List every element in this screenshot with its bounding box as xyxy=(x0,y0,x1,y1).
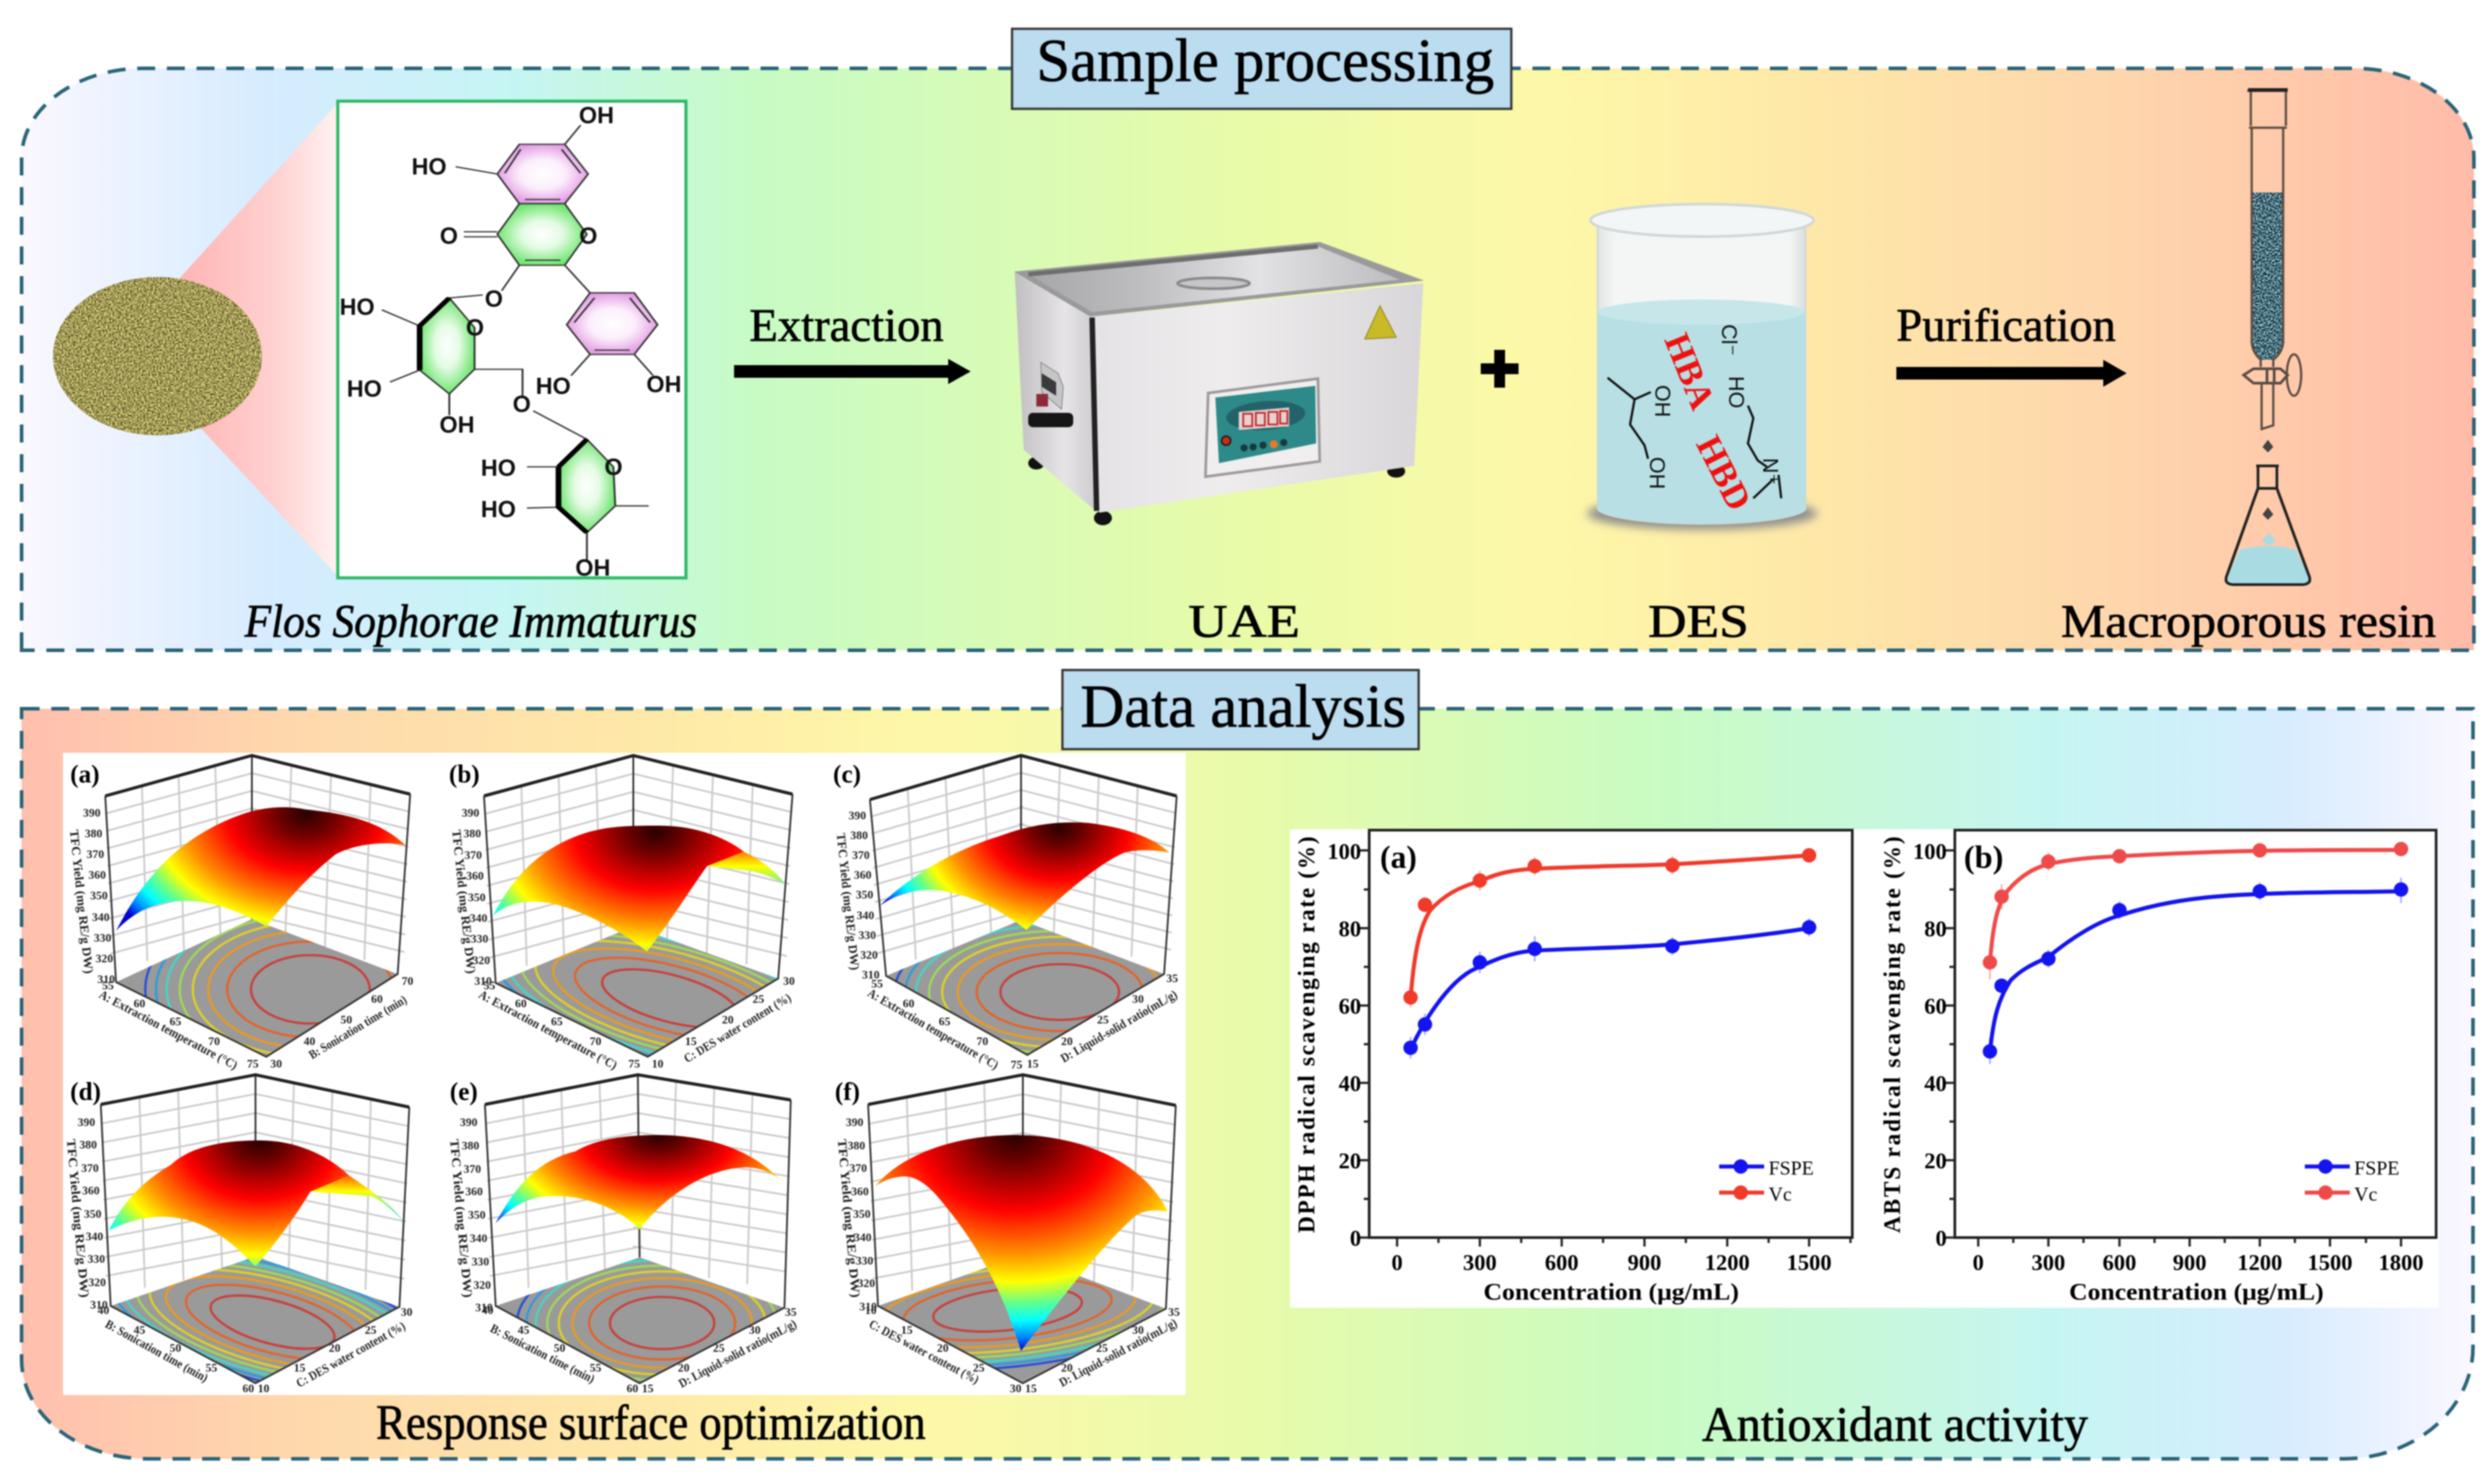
chart: surface plot a: 75 xyxy=(246,1057,259,1070)
chart: surface plot b: TFC Yield (mg RE/g DW) xyxy=(449,829,477,975)
chart: DPPH radical scavenging rate: 300 xyxy=(1463,1251,1497,1275)
chart: surface plot e: 380 xyxy=(461,1139,479,1152)
chart: surface plot e: 310 xyxy=(475,1301,493,1314)
chart: surface plot e: 25 xyxy=(712,1341,725,1354)
chart: surface plot a: 65 xyxy=(169,1015,182,1028)
chart: surface plot e: D: Liquid-solid ratio(mL/g) xyxy=(677,1318,800,1391)
chart: surface plot d xyxy=(67,1072,413,1393)
chart: DPPH radical scavenging rate: 0 xyxy=(1349,1227,1361,1251)
chart: surface plot b: 390 xyxy=(461,806,479,819)
chart: surface plot b: 25 xyxy=(752,992,765,1006)
chart: surface plot a: 350 xyxy=(90,889,108,902)
icon: pink zoom cone xyxy=(180,103,337,576)
chart: ABTS radical scavenging rate: 40 xyxy=(1924,1072,1947,1096)
chart: surface plot b: 370 xyxy=(464,848,482,862)
chart: surface plot c: 25 xyxy=(1098,1013,1109,1026)
chart: surface plot a: 60 xyxy=(371,992,383,1006)
icon: ultrasonic bath xyxy=(1014,242,1424,525)
molecule atom labels: HO xyxy=(347,375,381,402)
chart: surface plot a: TFC Yield (mg RE/g DW) xyxy=(67,829,94,975)
molecule atom labels: OH xyxy=(576,554,610,581)
chart: DPPH radical scavenging rate: 1200 xyxy=(1705,1251,1750,1275)
chart: surface plot f: 350 xyxy=(853,1207,871,1220)
chemical structures in beaker: OH xyxy=(1644,457,1669,489)
label: HBA: HBA xyxy=(1656,327,1724,416)
chart: surface plot b: A: Extraction temperature (°C) xyxy=(476,988,619,1073)
chart: surface plot a: 370 xyxy=(86,847,104,861)
chart: surface plot a: 360 xyxy=(88,868,106,881)
chart: DPPH radical scavenging rate: 0 xyxy=(1392,1251,1402,1275)
chart: surface plot f: 25 xyxy=(973,1361,985,1374)
chart: surface plot c: 320 xyxy=(860,948,878,961)
chart: surface plot a: 390 xyxy=(83,806,101,819)
molecule atom labels: OH xyxy=(646,371,682,398)
chart: surface plot f: D: Liquid-solid ratio(mL/g) xyxy=(1057,1317,1180,1390)
chart: DPPH radical scavenging rate: Concentration (μg/mL) xyxy=(1483,1279,1739,1305)
chart: surface plot d: 310 xyxy=(90,1298,108,1311)
label: Purification: Purification xyxy=(1896,300,2116,352)
chart: surface plot c: 370 xyxy=(852,848,870,862)
chemical structures in beaker: HO xyxy=(1724,376,1748,408)
chart: surface plot c: 20 xyxy=(1062,1034,1072,1048)
chart: DPPH radical scavenging rate: (a) xyxy=(1380,839,1417,875)
chemical structures in beaker: N⁺ xyxy=(1758,458,1782,485)
molecule atom labels: O xyxy=(440,222,458,249)
molecule atom labels: HO xyxy=(480,496,516,523)
chart: surface plot c: (c) xyxy=(833,761,861,789)
icon: plus sign xyxy=(1481,350,1519,388)
chart: ABTS radical scavenging rate xyxy=(1879,830,2436,1305)
chart: surface plot e: 50 xyxy=(554,1341,565,1354)
series: FSPE xyxy=(1983,878,2408,1064)
molecule atom labels: HO xyxy=(412,153,446,180)
chart: surface plot c: 30 xyxy=(1132,992,1144,1006)
chart: surface plot c: 350 xyxy=(856,888,874,901)
chart: surface plot e: 40 xyxy=(482,1303,493,1317)
chart: surface plot c: 380 xyxy=(850,828,868,842)
chart: surface plot e: 350 xyxy=(468,1208,486,1221)
chart: surface plot a: 70 xyxy=(209,1034,220,1048)
chart: surface plot c: 70 xyxy=(977,1034,988,1048)
chart: ABTS radical scavenging rate: 20 xyxy=(1924,1149,1947,1174)
chart: ABTS radical scavenging rate: 1200 xyxy=(2237,1251,2282,1275)
chart: surface plot e: B: Sonication time (min) xyxy=(488,1322,596,1387)
chart: surface plot c: 360 xyxy=(854,868,872,881)
chart: surface plot f: 20 xyxy=(1062,1361,1072,1374)
chart: surface plot f: 10 xyxy=(865,1303,876,1317)
chart: surface plot c: 15 xyxy=(1027,1057,1039,1070)
chart: surface plot c: 330 xyxy=(858,928,876,942)
chart: surface plot e: (e) xyxy=(450,1078,478,1106)
chart: surface plot e: 330 xyxy=(471,1255,489,1268)
chart: surface plot d: 340 xyxy=(85,1229,103,1243)
chart: surface plot b: 310 xyxy=(474,974,492,988)
chart: surface plot e: 30 xyxy=(748,1323,761,1336)
label: DES: DES xyxy=(1648,596,1749,648)
chart: surface plot d: 60 xyxy=(243,1381,254,1395)
label: UAE: UAE xyxy=(1188,596,1300,648)
chart: surface plot c: 310 xyxy=(862,968,880,981)
chart: ABTS radical scavenging rate: 80 xyxy=(1924,917,1947,942)
chart: surface plot d: 45 xyxy=(133,1323,146,1336)
chart: ABTS radical scavenging rate: 900 xyxy=(2173,1251,2207,1275)
chart: surface plot c: TFC Yield (mg RE/g DW) xyxy=(833,833,861,971)
chart: surface plot f: 30 xyxy=(1132,1323,1144,1336)
chart: surface plot f xyxy=(835,1072,1180,1393)
chart: surface plot c: 75 xyxy=(1011,1058,1023,1071)
chart: surface plot f: 20 xyxy=(937,1341,948,1354)
chart: surface plot a: 380 xyxy=(85,827,103,840)
chart: surface plot f: 340 xyxy=(854,1230,872,1244)
chart: surface plot a: 310 xyxy=(97,972,115,986)
chart: surface plot c: 390 xyxy=(848,809,866,822)
chart: ABTS radical scavenging rate: Concentration (μg/mL) xyxy=(2069,1279,2324,1305)
series: Vc xyxy=(1983,842,2408,979)
chart: surface plot f: C: DES water content (%) xyxy=(866,1318,981,1388)
chart: surface plot f: 30 xyxy=(1009,1381,1022,1395)
chart: DPPH radical scavenging rate: 80 xyxy=(1339,917,1361,942)
chart: surface plot b xyxy=(449,753,795,1072)
legend: Vc xyxy=(1769,1183,1792,1205)
chart: surface plot a: 30 xyxy=(270,1057,282,1070)
chart: surface plot e: 35 xyxy=(784,1305,797,1319)
chart: surface plot b: 60 xyxy=(515,997,527,1010)
chart: surface plot d: (d) xyxy=(70,1078,101,1106)
chart: DPPH radical scavenging rate: 900 xyxy=(1627,1251,1662,1275)
label: Extraction: Extraction xyxy=(749,300,944,352)
legend: FSPE xyxy=(2354,1157,2399,1179)
chart: surface plot d: 50 xyxy=(169,1341,182,1354)
molecule atom labels: HO xyxy=(536,372,570,399)
chart: ABTS radical scavenging rate: 60 xyxy=(1924,995,1947,1019)
chart: DPPH radical scavenging rate: 60 xyxy=(1339,995,1361,1019)
chart: surface plot d: 10 xyxy=(257,1381,270,1395)
chart: surface plot c: A: Extraction temperature (°C) xyxy=(865,987,1000,1073)
chart: surface plot d: 55 xyxy=(205,1361,218,1374)
chart: surface plot e: 360 xyxy=(465,1185,483,1198)
legend xyxy=(2305,1157,2399,1205)
panel: data analysis xyxy=(22,709,2473,1459)
label: Flos Sophorae Immaturus: Flos Sophorae Immaturus xyxy=(244,596,697,648)
molecule atom labels: HO xyxy=(340,293,374,320)
chart: surface plot a: 330 xyxy=(94,931,112,944)
chart: surface plot f: 35 xyxy=(1168,1305,1180,1319)
chart: surface plot b: 55 xyxy=(484,979,496,992)
chart: surface plot b: 20 xyxy=(721,1013,734,1026)
chart: surface plot f: TFC Yield (mg RE/g DW) xyxy=(834,1139,862,1299)
chemical structures in beaker: Cl⁻ xyxy=(1716,324,1741,356)
chart: DPPH radical scavenging rate: 1500 xyxy=(1787,1251,1832,1275)
panel: response surface plots xyxy=(63,753,1224,1426)
panel: molecular structure xyxy=(338,101,685,581)
chart: surface plot b: 350 xyxy=(468,890,486,904)
chart: surface plot b: (b) xyxy=(449,761,479,789)
chart: DPPH radical scavenging rate: 20 xyxy=(1339,1149,1361,1174)
chart: surface plot f: 320 xyxy=(857,1276,875,1290)
series: FSPE xyxy=(1403,918,1816,1059)
chart: ABTS radical scavenging rate: 1800 xyxy=(2379,1251,2424,1275)
panel: antioxidant charts xyxy=(1290,829,2439,1308)
chart: surface plot a: 40 xyxy=(304,1034,315,1048)
series: Vc xyxy=(1403,848,1816,1007)
molecule atom labels: O xyxy=(466,314,484,341)
chart: surface plot a: A: Extraction temperature (°C) xyxy=(96,988,239,1073)
chart: ABTS radical scavenging rate: 600 xyxy=(2102,1251,2137,1275)
chart: surface plot e xyxy=(446,1075,807,1396)
chart: surface plot f: 360 xyxy=(851,1185,869,1198)
chart: surface plot c: D: Liquid-solid ratio(mL/g) xyxy=(1059,988,1180,1066)
chart: DPPH radical scavenging rate: 100 xyxy=(1328,840,1361,864)
panel: sample processing xyxy=(22,68,2474,650)
chart: surface plot b: 330 xyxy=(470,932,488,945)
chart: ABTS radical scavenging rate: (b) xyxy=(1964,839,2003,875)
chart: surface plot f: 15 xyxy=(901,1323,913,1336)
heading: Sample processing: Sample processing xyxy=(1036,26,1494,94)
chart: surface plot b: 360 xyxy=(466,869,484,882)
chart: surface plot a: 340 xyxy=(92,910,110,924)
legend xyxy=(1719,1157,1814,1205)
chart: surface plot e: 60 xyxy=(626,1381,639,1395)
arrow: extraction xyxy=(734,359,971,384)
chart: ABTS radical scavenging rate: 1500 xyxy=(2307,1251,2352,1275)
chart: surface plot f: 390 xyxy=(846,1115,864,1129)
chart: surface plot f: 25 xyxy=(1096,1341,1108,1354)
heading: Data analysis: Data analysis xyxy=(1080,672,1406,740)
chart: surface plot b: C: DES water content (%) xyxy=(682,991,794,1066)
chart: surface plot d: 30 xyxy=(401,1305,412,1319)
chart: surface plot d: 390 xyxy=(77,1115,95,1129)
molecule atom labels xyxy=(340,102,682,581)
chart: ABTS radical scavenging rate: 100 xyxy=(1913,840,1947,864)
chart: ABTS radical scavenging rate: 0 xyxy=(1936,1227,1947,1251)
chart: surface plot b: 380 xyxy=(463,827,481,840)
chart: surface plot c: 55 xyxy=(871,977,883,990)
chart: surface plot e: 45 xyxy=(518,1323,530,1336)
chart: surface plot d: 360 xyxy=(82,1184,100,1197)
chart: surface plot d: 330 xyxy=(87,1252,105,1265)
chart: surface plot e: 20 xyxy=(678,1361,689,1374)
chart: surface plot d: 370 xyxy=(81,1161,99,1175)
molecule atom labels: OH xyxy=(579,102,614,129)
chart: surface plot e: 55 xyxy=(590,1361,602,1374)
chart: surface plot c: 340 xyxy=(856,908,874,922)
legend: Vc xyxy=(2354,1183,2378,1205)
chart: surface plot b: 75 xyxy=(628,1057,641,1070)
chart: surface plot f: 310 xyxy=(859,1300,877,1313)
chart: surface plot f: 330 xyxy=(856,1254,874,1267)
chart: surface plot f: (f) xyxy=(835,1078,860,1106)
chemical structures in beaker: OH xyxy=(1650,385,1674,417)
chart: surface plot c xyxy=(833,753,1178,1071)
label: HBD: HBD xyxy=(1689,429,1760,517)
chart: surface plot b: 65 xyxy=(551,1015,563,1028)
chemical structures in beaker xyxy=(1608,324,1782,498)
chart: ABTS radical scavenging rate: 0 xyxy=(1973,1251,1984,1275)
icon: Flos Sophorae Immaturus flower buds xyxy=(53,277,262,435)
chart: ABTS radical scavenging rate: 300 xyxy=(2031,1251,2065,1275)
chart: surface plot f: 370 xyxy=(849,1161,867,1175)
label: Response surface optimization: Response surface optimization xyxy=(376,1395,926,1450)
chart: surface plot e: TFC Yield (mg RE/g DW) xyxy=(446,1139,474,1299)
molecule atom labels: O xyxy=(513,390,531,417)
chart: ABTS radical scavenging rate: ABTS radical scavenging rate (%) xyxy=(1879,836,1905,1233)
chart: surface plot d: 25 xyxy=(365,1323,377,1336)
molecule rings and bonds xyxy=(381,125,658,560)
chart: surface plot f: 15 xyxy=(1026,1381,1037,1395)
chart: surface plot e: 340 xyxy=(470,1231,488,1245)
chart: surface plot b: 340 xyxy=(470,911,488,925)
molecule atom labels: O xyxy=(605,453,623,480)
chart: surface plot b: 15 xyxy=(685,1034,697,1048)
chart: surface plot a: (a) xyxy=(70,761,100,789)
chart: DPPH radical scavenging rate: 40 xyxy=(1339,1072,1361,1096)
chart: surface plot d: 380 xyxy=(79,1138,97,1151)
chart: surface plot a: 50 xyxy=(340,1013,353,1026)
chart: surface plot b: 320 xyxy=(472,953,490,967)
chart: surface plot d: 350 xyxy=(84,1207,102,1220)
molecule atom labels: O xyxy=(485,285,503,312)
chart: surface plot d: TFC Yield (mg RE/g DW) xyxy=(63,1139,91,1299)
chart: surface plot b: 10 xyxy=(651,1057,664,1070)
chart: surface plot d: 15 xyxy=(293,1361,306,1374)
chart: DPPH radical scavenging rate: DPPH radical scavenging rate (%) xyxy=(1294,836,1320,1233)
chart: surface plot d: B: Sonication time (min) xyxy=(103,1318,211,1386)
chart: surface plot e: 390 xyxy=(460,1115,478,1129)
label: Macroporous resin: Macroporous resin xyxy=(2061,596,2436,648)
chart: surface plot e: 320 xyxy=(473,1278,491,1292)
chart: surface plot d: 320 xyxy=(88,1275,106,1289)
legend: FSPE xyxy=(1769,1157,1814,1179)
chart: DPPH radical scavenging rate xyxy=(1294,830,1852,1305)
chart: surface plot e: 15 xyxy=(642,1381,654,1395)
chart: surface plot d: 20 xyxy=(329,1341,340,1354)
chart: surface plot c: 35 xyxy=(1166,971,1178,985)
arrow: purification xyxy=(1896,360,2127,387)
label: Antioxidant activity: Antioxidant activity xyxy=(1702,1397,2088,1452)
molecule atom labels: OH xyxy=(439,411,475,438)
chart: surface plot b: 70 xyxy=(590,1034,601,1048)
chart: surface plot a: 55 xyxy=(103,979,114,992)
chart: surface plot a xyxy=(68,753,414,1072)
icon: macroporous resin column and flask xyxy=(2226,90,2310,585)
chart: surface plot a: B: Sonication time (min) xyxy=(307,993,409,1062)
icon: DES beaker xyxy=(1587,204,1817,530)
chart: DPPH radical scavenging rate: 600 xyxy=(1545,1251,1579,1275)
molecule atom labels: HO xyxy=(480,454,516,481)
chart: surface plot a: 70 xyxy=(401,974,414,988)
chart: surface plot c: 65 xyxy=(939,1015,951,1028)
chart: surface plot f: 380 xyxy=(847,1139,865,1152)
chart: surface plot e: 370 xyxy=(463,1162,481,1176)
chart: surface plot d: 40 xyxy=(97,1303,110,1317)
chart: surface plot d: C: DES water content (%) xyxy=(294,1319,408,1390)
chart: surface plot c: 60 xyxy=(903,997,914,1010)
chart: surface plot b: 30 xyxy=(783,974,795,988)
chart: surface plot a: 60 xyxy=(133,997,146,1010)
chart: surface plot a: 320 xyxy=(95,952,113,965)
molecule atom labels: O xyxy=(579,222,597,249)
